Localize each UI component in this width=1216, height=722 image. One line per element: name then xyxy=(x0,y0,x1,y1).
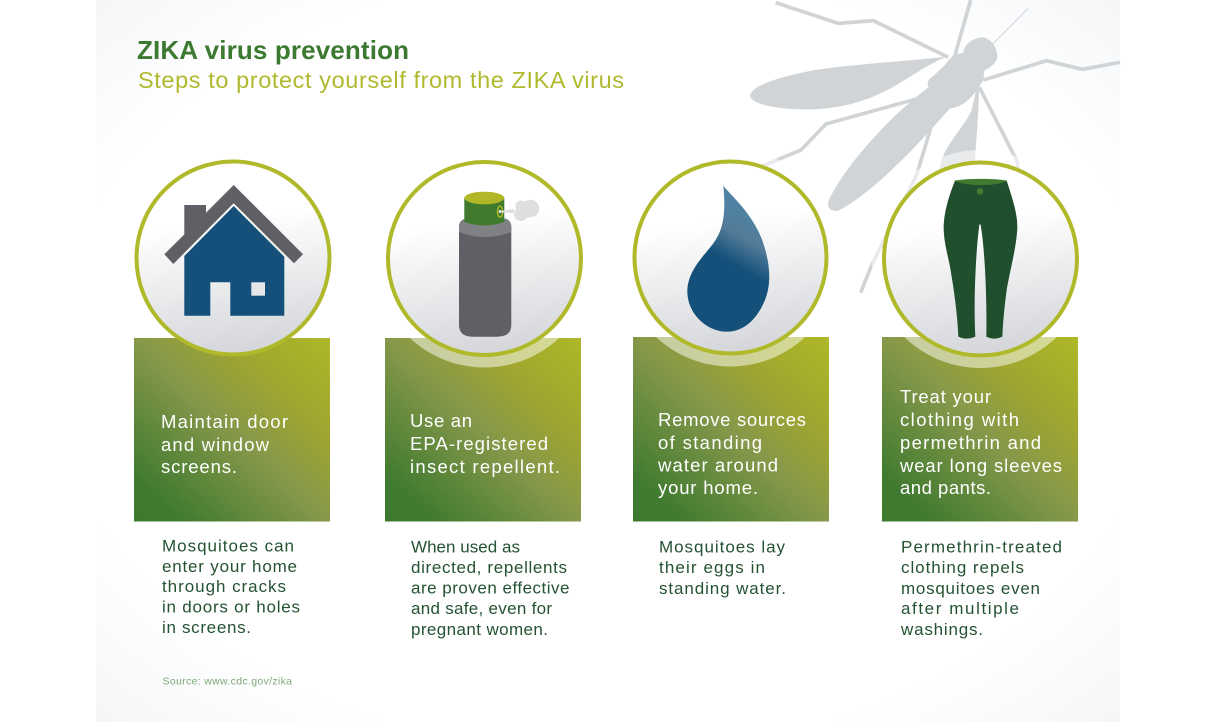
panel: insect repellent xyxy=(376,150,594,639)
body text: clothing repels xyxy=(901,558,1024,577)
heading text: Use an xyxy=(410,410,472,431)
body text: mosquitoes even xyxy=(901,579,1040,598)
heading text: clothing with xyxy=(900,409,1019,430)
heading text: water around xyxy=(657,454,778,476)
body text: in doors or holes xyxy=(162,598,300,616)
body text xyxy=(900,538,1062,639)
title xyxy=(137,35,624,93)
body text: standing water. xyxy=(659,579,786,598)
heading text xyxy=(161,411,288,477)
body text: enter your home xyxy=(162,557,297,576)
panel: standing water xyxy=(622,148,840,598)
subtitle: Steps to protect yourself from the ZIKA virus xyxy=(138,67,624,93)
icon: pants xyxy=(944,179,1017,339)
title: ZIKA virus prevention xyxy=(137,35,409,65)
heading text: and window xyxy=(161,434,270,455)
green text box xyxy=(385,338,581,522)
body text: When used as xyxy=(411,538,520,556)
body text: Mosquitoes can xyxy=(162,536,294,556)
source note: Source: www.cdc.gov/zika xyxy=(162,676,292,688)
icon: house xyxy=(164,185,303,316)
icon: spray can xyxy=(459,192,539,337)
body text: washings. xyxy=(900,620,983,639)
body text xyxy=(411,538,570,639)
green text box xyxy=(882,337,1078,522)
heading text: permethrin and xyxy=(900,432,1041,453)
panel: door and window screens xyxy=(134,162,330,637)
body text: pregnant women. xyxy=(411,620,548,639)
circle xyxy=(884,162,1077,356)
green text box xyxy=(134,338,330,522)
heading text: Remove sources xyxy=(658,409,806,430)
body text: their eggs in xyxy=(659,558,765,577)
circle halo xyxy=(376,150,594,368)
body text: are proven effective xyxy=(411,578,570,598)
icon: water drop xyxy=(687,186,769,332)
body text: Permethrin-treated xyxy=(901,538,1062,556)
body text: in screens. xyxy=(162,618,251,637)
circle xyxy=(388,162,581,355)
heading text xyxy=(899,386,1062,498)
heading text: screens. xyxy=(161,456,237,477)
body text: and safe, even for xyxy=(411,599,552,618)
heading text: Maintain door xyxy=(161,411,288,432)
body text xyxy=(162,536,300,637)
circle halo xyxy=(872,150,1090,368)
heading text xyxy=(657,409,806,498)
body text: Mosquitoes lay xyxy=(659,538,786,556)
green text box xyxy=(633,337,829,522)
circle xyxy=(634,162,826,354)
heading text: and pants. xyxy=(900,477,991,498)
heading text: your home. xyxy=(658,477,758,498)
heading text: of standing xyxy=(658,432,762,453)
panel: treat clothing xyxy=(872,150,1090,639)
mosquito silhouette xyxy=(750,0,1120,293)
body text xyxy=(659,538,786,598)
heading text: Treat your xyxy=(900,386,991,407)
heading text: insect repellent. xyxy=(410,456,560,477)
circle xyxy=(136,162,330,354)
heading text: wear long sleeves xyxy=(899,455,1062,476)
body text: directed, repellents xyxy=(411,558,567,577)
heading text: EPA-registered xyxy=(410,433,548,454)
body text: after multiple xyxy=(901,599,1019,618)
circle halo xyxy=(622,148,840,366)
heading text xyxy=(410,410,560,477)
body text: through cracks xyxy=(162,577,286,596)
